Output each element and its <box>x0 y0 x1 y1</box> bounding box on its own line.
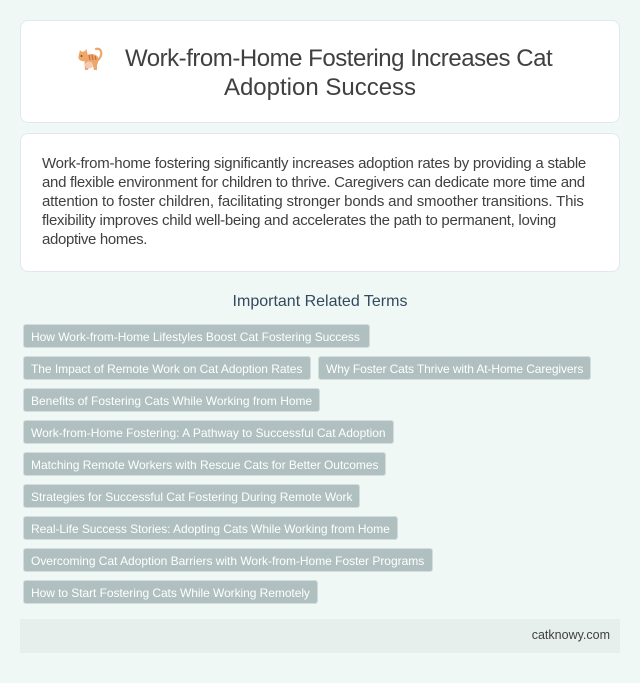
tag <box>318 356 591 380</box>
tag <box>23 420 394 444</box>
tag: Real-Life Success Stories: Adopting Cats While Working from Home <box>31 522 390 536</box>
tag <box>23 580 318 604</box>
tag <box>23 324 370 348</box>
tag <box>23 516 398 540</box>
tag <box>23 452 386 476</box>
tag: The Impact of Remote Work on Cat Adoption Rates <box>31 362 302 376</box>
panel: summary card <box>20 133 620 272</box>
summary paragraph <box>42 155 586 248</box>
tag: Strategies for Successful Cat Fostering During Remote Work <box>31 490 352 504</box>
tag <box>23 484 360 508</box>
summary paragraph: adoptive homes. <box>42 231 147 248</box>
icon: cat <box>78 48 102 70</box>
title: Work-from-Home Fostering Increases Cat <box>125 45 552 72</box>
summary paragraph: Work-from-home fostering significantly increases adoption rates by providing a stable <box>42 155 586 172</box>
title <box>125 45 552 101</box>
heading: important related terms: Important Related Terms <box>233 293 407 310</box>
summary paragraph: and flexible environment for children to thrive. Caregivers can dedicate more time and <box>42 174 585 191</box>
tag: How Work-from-Home Lifestyles Boost Cat Fostering Success <box>31 330 360 344</box>
tag: Why Foster Cats Thrive with At-Home Caregivers <box>326 362 583 376</box>
tag: Overcoming Cat Adoption Barriers with Work-from-Home Foster Programs <box>31 554 424 568</box>
tag: How to Start Fostering Cats While Working Remotely <box>31 586 310 600</box>
tag list <box>23 324 591 604</box>
tag: Benefits of Fostering Cats While Working from Home <box>31 394 312 408</box>
tag: Work-from-Home Fostering: A Pathway to Successful Cat Adoption <box>31 426 386 440</box>
footer source text: catknowy.com <box>532 628 610 642</box>
summary paragraph: flexibility improves child well-being and accelerates the path to permanent, loving <box>42 212 556 229</box>
tag: Matching Remote Workers with Rescue Cats for Better Outcomes <box>31 458 378 472</box>
tag <box>23 388 320 412</box>
tag <box>23 548 433 572</box>
footer bar <box>20 619 620 653</box>
tag <box>23 356 311 380</box>
title: Adoption Success <box>224 74 416 101</box>
summary paragraph: attention to foster children, facilitating stronger bonds and smoother transitions. This <box>42 193 584 210</box>
panel: title card <box>20 20 620 123</box>
